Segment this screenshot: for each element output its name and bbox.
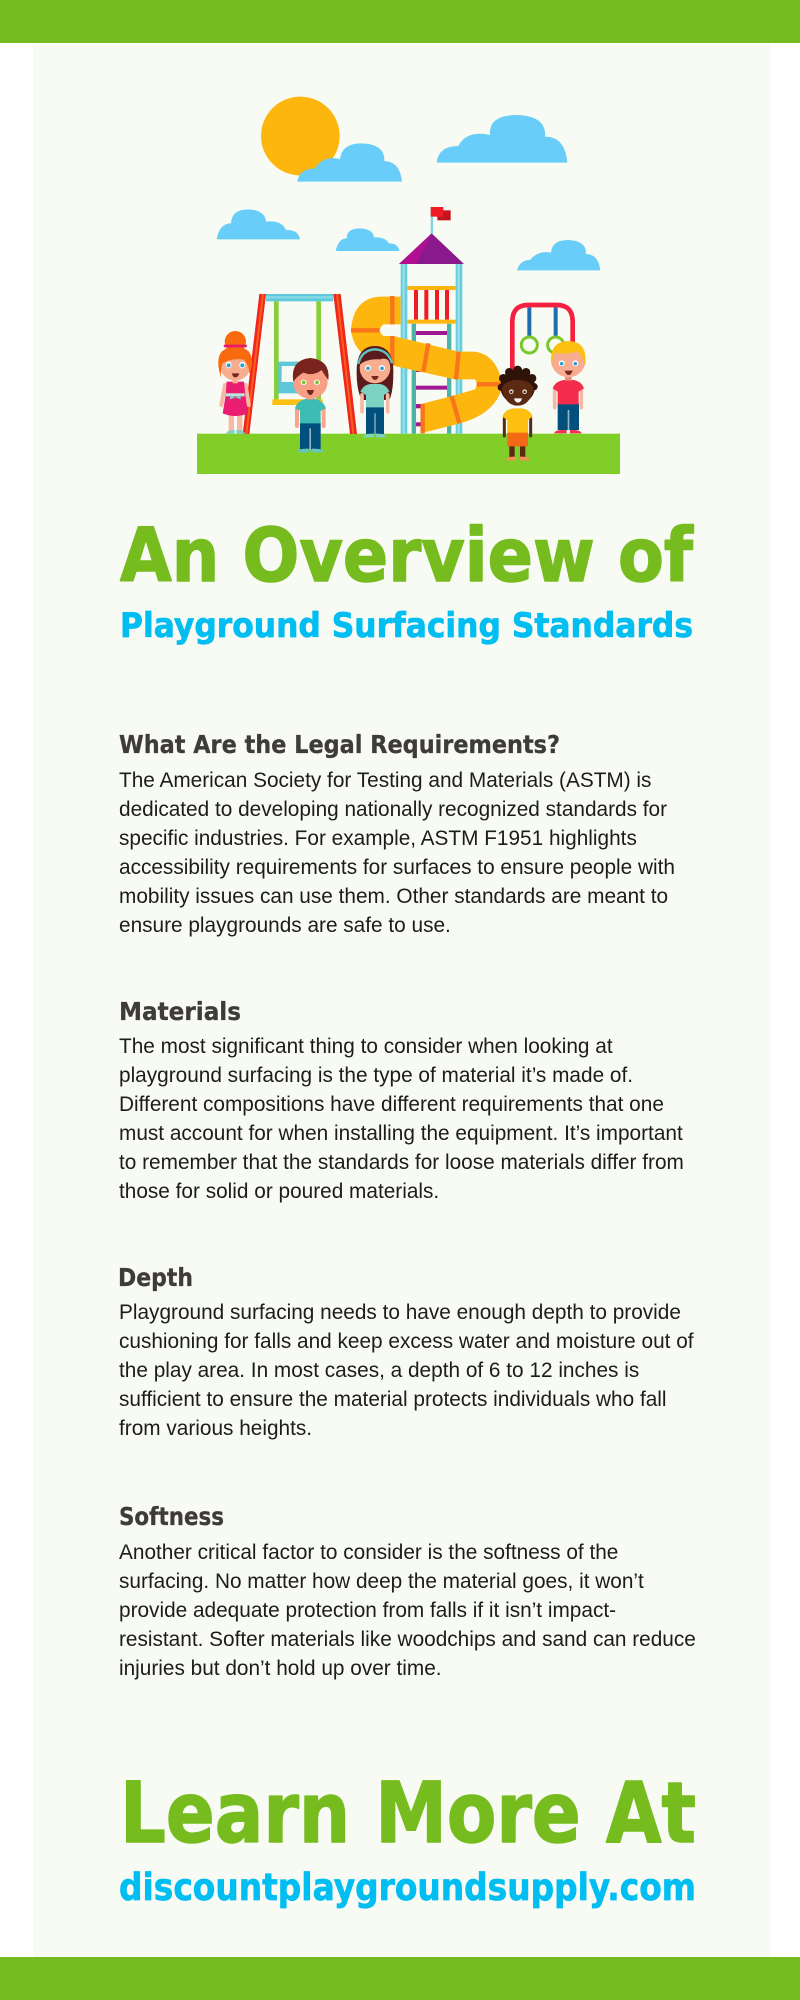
playground illustration (197, 97, 620, 474)
body text: softness: injuries but don’t hold up over time. (119, 1657, 442, 1680)
body text: softness (119, 1541, 696, 1680)
body text: legal requirements: dedicated to developing nationally recognized standards for (119, 798, 667, 821)
subtitle: Playground Surfacing Standards (120, 606, 693, 646)
child: girl with long hair (357, 346, 393, 437)
body text: materials: must account for when installing the equipment. It’s important (119, 1122, 683, 1145)
body text: softness: resistant. Softer materials like woodchips and sand can reduce (119, 1628, 696, 1651)
child: boy in yellow shirt (498, 366, 538, 460)
body text: depth: the play area. In most cases, a depth of 6 to 12 inches is (119, 1359, 639, 1382)
play tower (399, 207, 464, 434)
section: materials (119, 997, 684, 1203)
top green bar (0, 0, 800, 43)
heading: softness: Softness (119, 1502, 224, 1531)
section: depth (118, 1263, 694, 1440)
body text: materials: to remember that the standards for loose materials differ from (119, 1151, 684, 1174)
heading: materials: Materials (119, 997, 241, 1026)
section: softness (119, 1502, 696, 1680)
body text: materials: playground surfacing is the type of material it’s made of. (119, 1064, 633, 1087)
body text: softness: surfacing. No matter how deep the material goes, it won’t (119, 1570, 644, 1593)
heading: depth: Depth (118, 1263, 193, 1292)
gymnastic rings (512, 305, 573, 373)
spiral slide (351, 296, 503, 433)
body text: depth (119, 1301, 694, 1440)
body text: materials: those for solid or poured materials. (119, 1180, 439, 1203)
body text: legal requirements: mobility issues can use them. Other standards are meant to (119, 885, 668, 908)
body text: materials: The most significant thing to consider when looking at (119, 1035, 613, 1058)
website url: discountplaygroundsupply.com (119, 1866, 696, 1909)
child: blond boy (551, 341, 586, 433)
grass ground (197, 434, 620, 474)
body text: materials (119, 1035, 684, 1203)
body text: materials: Different compositions have different requirements that one (119, 1093, 664, 1116)
swing set (243, 294, 357, 434)
section: legal requirements (119, 730, 675, 937)
heading: legal requirements: What Are the Legal Requirements? (119, 730, 560, 759)
body text: legal requirements: The American Society for Testing and Materials (ASTM) is (119, 769, 651, 792)
body text: depth: Playground surfacing needs to have enough depth to provide (119, 1301, 681, 1324)
body text: legal requirements (119, 769, 675, 937)
body text: softness: Another critical factor to consider is the softness of the (119, 1541, 618, 1564)
title: An Overview of (120, 513, 694, 599)
child: girl with orange bun (218, 331, 252, 434)
body text: legal requirements: specific industries. For example, ASTM F1951 highlights (119, 827, 637, 850)
body text: depth: cushioning for falls and keep excess water and moisture out of (119, 1330, 694, 1353)
icon: sun (261, 97, 340, 175)
icon: clouds (217, 115, 600, 270)
body text: depth: sufficient to ensure the material protects individuals who fall (119, 1388, 667, 1411)
bottom green bar (0, 1957, 800, 2000)
body text: depth: from various heights. (119, 1417, 312, 1440)
body text: legal requirements: ensure playgrounds are safe to use. (119, 914, 451, 937)
body text: legal requirements: accessibility requirements for surfaces to ensure people with (119, 856, 675, 879)
body text: softness: provide adequate protection from falls if it isn’t impact- (119, 1599, 616, 1622)
call to action heading: Learn More At (120, 1764, 696, 1862)
child: boy in teal shirt (293, 358, 329, 452)
